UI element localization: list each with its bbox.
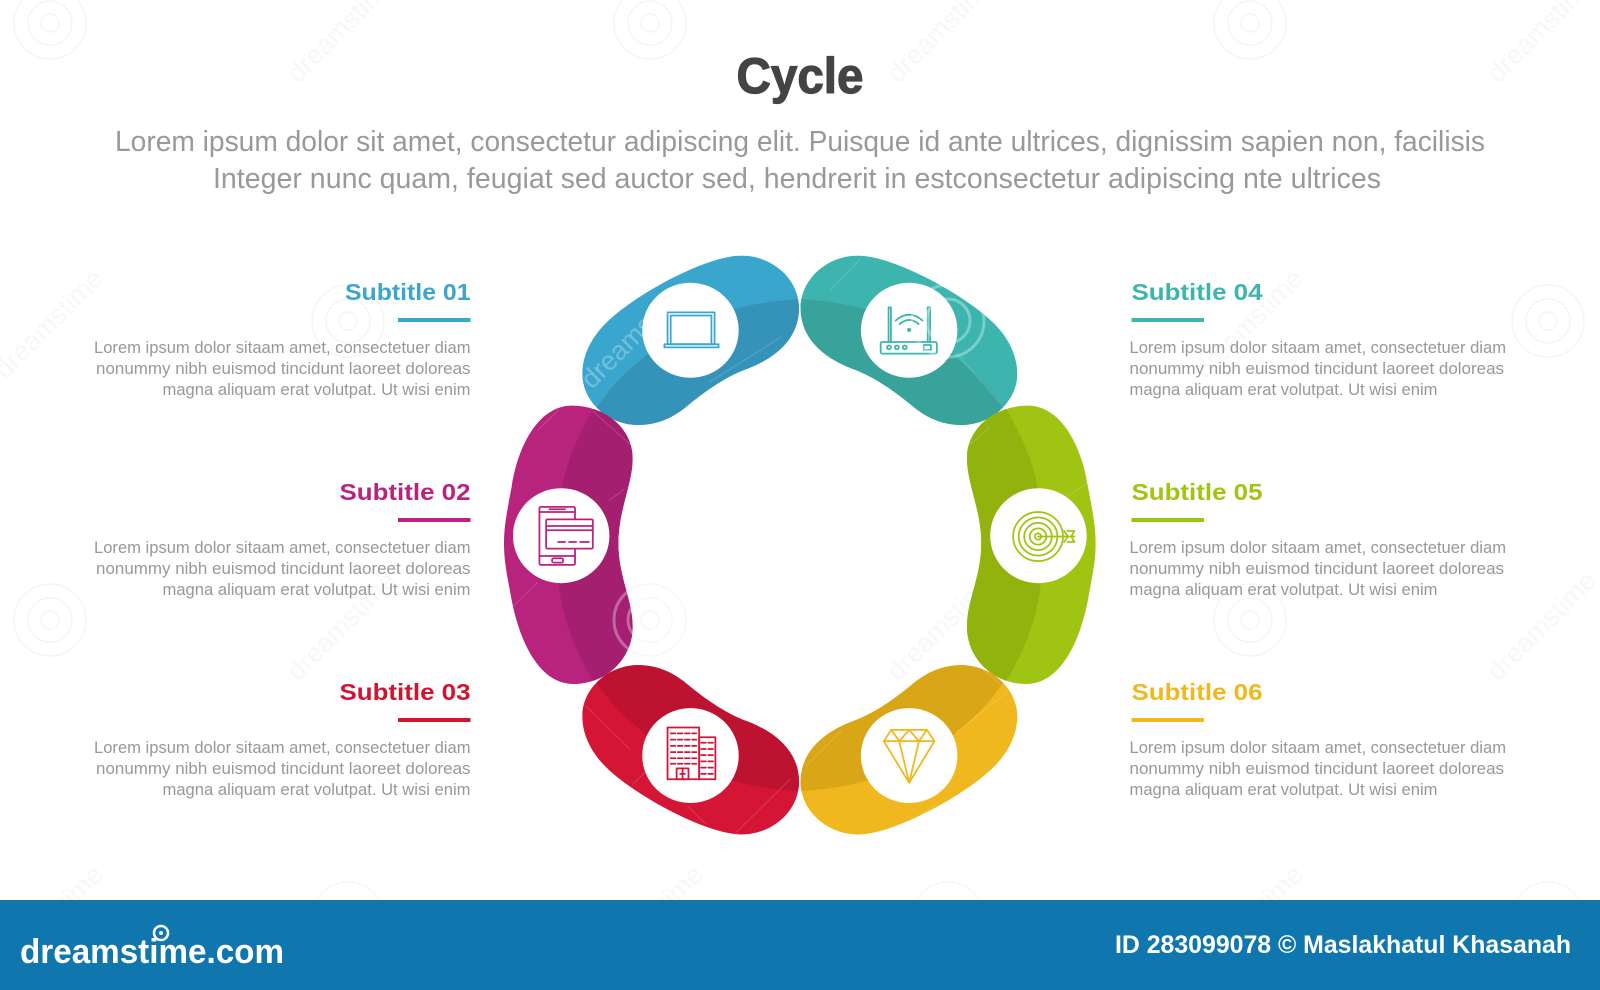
description: Lorem ipsum dolor sitaam amet, consectetuer diam (94, 339, 470, 357)
watermark over diagram (575, 273, 984, 656)
panel: subtitle 03 (94, 679, 471, 799)
watermark pattern: dreamstime (1481, 565, 1600, 686)
heading: subtitle 06: Subtitle 06 (1132, 679, 1262, 705)
panel: subtitle 06 (1130, 679, 1506, 799)
footer logo: dreamstime.com (20, 933, 284, 971)
watermark pattern: dreamstime (281, 565, 402, 686)
heading: subtitle 05: Subtitle 05 (1132, 479, 1263, 505)
rule (398, 318, 470, 322)
description: nonummy nibh euismod tincidunt laoreet doloreas (96, 360, 470, 378)
segment: teal (800, 256, 1018, 425)
segment: purple (504, 406, 633, 684)
watermark pattern: dreamstime (1188, 859, 1309, 980)
panel: subtitle 02 (94, 479, 471, 599)
description: nonummy nibh euismod tincidunt laoreet doloreas (96, 760, 470, 778)
description: magna aliquam erat volutpat. Ut wisi enim (162, 581, 471, 599)
description: magna aliquam erat volutpat. Ut wisi enim (162, 381, 471, 399)
watermark highlight lines (514, 259, 1087, 833)
description: nonummy nibh euismod tincidunt laoreet doloreas (1130, 360, 1504, 378)
watermark pattern: dreamstime (881, 565, 1002, 686)
rule (1132, 718, 1204, 722)
description: nonummy nibh euismod tincidunt laoreet doloreas (1130, 760, 1504, 778)
description: Lorem ipsum dolor sitaam amet, consectetuer diam (1130, 539, 1506, 557)
description (1130, 739, 1506, 799)
icon: laptop (642, 283, 739, 378)
description: nonummy nibh euismod tincidunt laoreet doloreas (1130, 560, 1504, 578)
icon: wifi router (861, 283, 957, 378)
description: magna aliquam erat volutpat. Ut wisi enim (1130, 581, 1438, 599)
description (94, 339, 471, 399)
title: Cycle (736, 48, 864, 104)
watermark pattern: dreamstime (1188, 263, 1309, 384)
segment: green (966, 406, 1096, 684)
description (94, 739, 471, 799)
segment: blue (582, 256, 799, 425)
rule (398, 718, 470, 722)
description: Lorem ipsum dolor sitaam amet, consectetuer diam (1130, 739, 1506, 757)
description: Lorem ipsum dolor sitaam amet, consectetuer diam (94, 739, 470, 757)
footer credit: ID 283099078 © Maslakhatul Khasanah (1115, 931, 1571, 959)
panel: subtitle 01 (94, 279, 471, 399)
watermark pattern: dreamstime (588, 859, 709, 980)
icon: diamond (861, 708, 957, 803)
intro text (115, 126, 1485, 195)
description (1130, 339, 1506, 399)
icon: phone with card (513, 488, 609, 583)
description: magna aliquam erat volutpat. Ut wisi enim (1130, 381, 1438, 399)
panel: subtitle 05 (1130, 479, 1506, 599)
rule (1132, 518, 1204, 522)
segment: yellow (800, 665, 1018, 834)
description: Lorem ipsum dolor sitaam amet, consectetuer diam (94, 539, 470, 557)
heading: subtitle 01: Subtitle 01 (345, 279, 471, 305)
intro text: Integer nunc quam, feugiat sed auctor sed, hendrerit in estconsectetur adipiscing nte ultrices (213, 163, 1381, 195)
panel: subtitle 04 (1130, 279, 1506, 399)
heading: subtitle 02: Subtitle 02 (340, 479, 470, 505)
description (1130, 539, 1506, 599)
rule (398, 518, 470, 522)
cycle diagram (490, 240, 1110, 850)
heading: subtitle 04: Subtitle 04 (1132, 279, 1263, 305)
footer band (0, 900, 1600, 990)
heading: subtitle 03: Subtitle 03 (340, 679, 470, 705)
intro text: Lorem ipsum dolor sit amet, consectetur adipiscing elit. Puisque id ante ultrices, dignissim sapien non, facilisis (115, 126, 1485, 158)
description: magna aliquam erat volutpat. Ut wisi enim (1130, 781, 1438, 799)
watermark over diagram: dreamstime (575, 273, 696, 394)
icon: office buildings (642, 708, 739, 803)
description: nonummy nibh euismod tincidunt laoreet doloreas (96, 560, 470, 578)
description: Lorem ipsum dolor sitaam amet, consectetuer diam (1130, 339, 1506, 357)
segment: red (582, 665, 799, 834)
rule (1132, 318, 1204, 322)
description (94, 539, 471, 599)
icon: target with arrow (990, 488, 1087, 583)
description: magna aliquam erat volutpat. Ut wisi enim (162, 781, 471, 799)
